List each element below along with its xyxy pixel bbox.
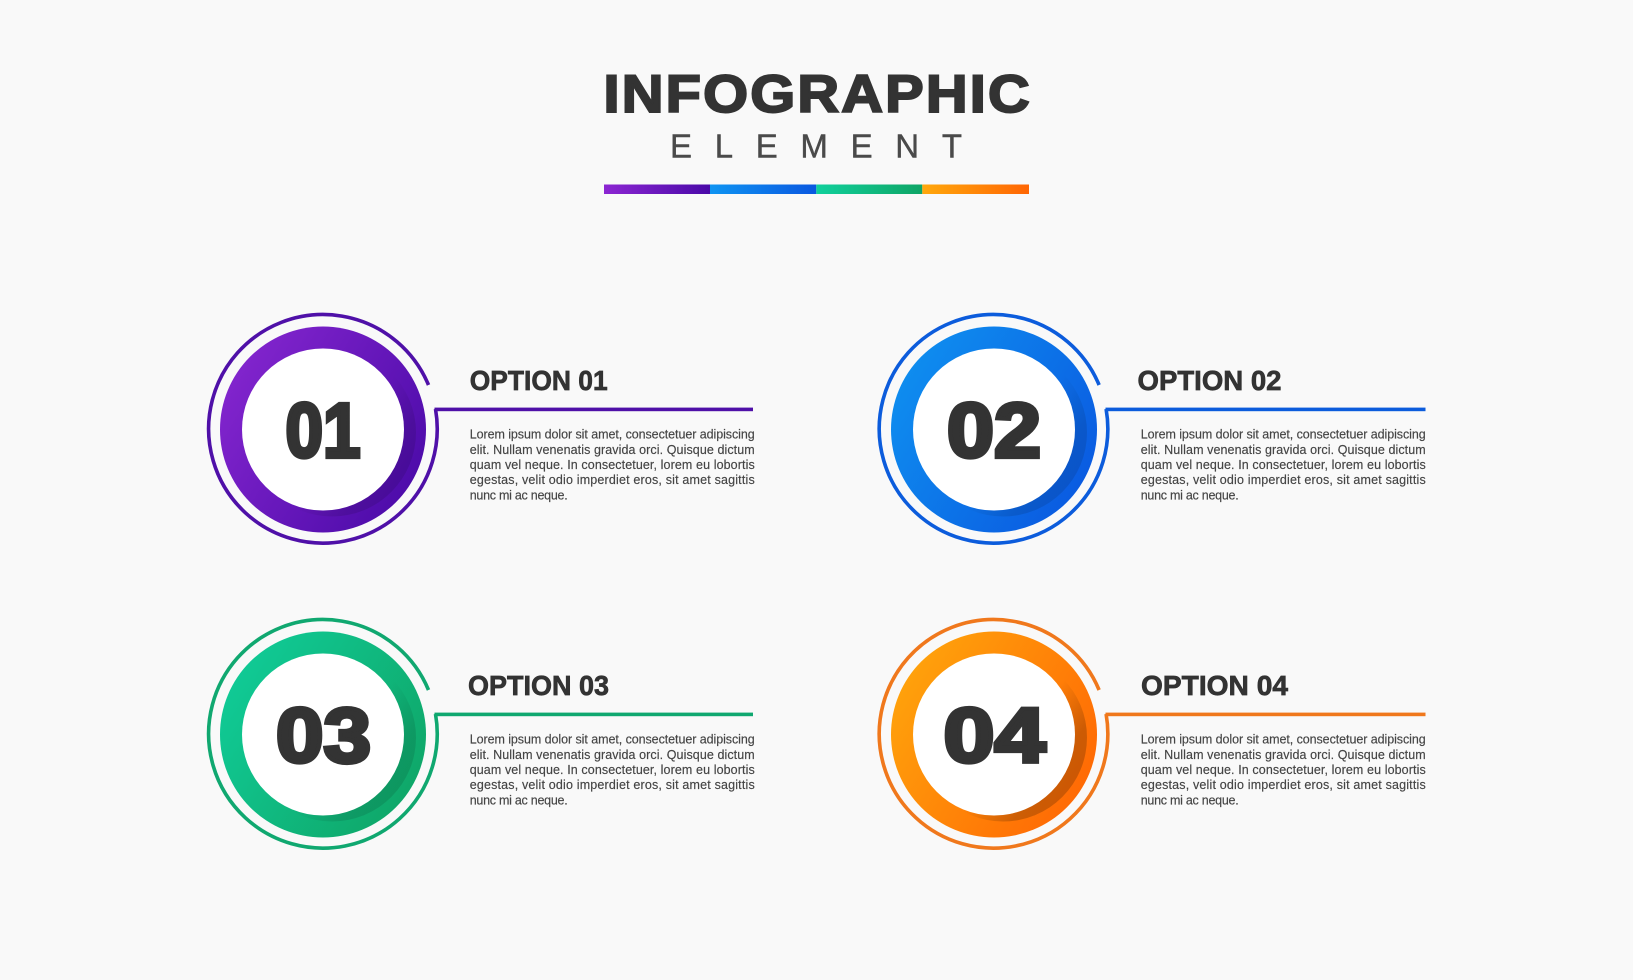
body text: egestas, velit odio imperdiet eros, sit amet sagittis xyxy=(470,473,755,487)
body text: nunc mi ac neque. xyxy=(1141,794,1239,808)
panel: option 02 xyxy=(879,315,1426,543)
icon: circle badge 03 xyxy=(209,620,437,848)
body text: Lorem ipsum dolor sit amet, consectetuer adipiscing xyxy=(470,732,755,746)
panel: option 03 xyxy=(209,620,755,848)
panel: option 04 xyxy=(879,620,1426,848)
heading: option 04: OPTION 04 xyxy=(1141,670,1288,701)
body text: quam vel neque. In consectetuer, lorem eu lobortis xyxy=(470,458,755,472)
title: INFOGRAPHIC xyxy=(604,64,1030,123)
connector line xyxy=(434,408,753,411)
body text: elit. Nullam venenatis gravida orci. Quisque dictum xyxy=(1141,748,1426,762)
subtitle: ELEMENT xyxy=(670,128,962,164)
body text: elit. Nullam venenatis gravida orci. Quisque dictum xyxy=(470,748,755,762)
body text xyxy=(1141,732,1426,808)
body text xyxy=(1141,428,1426,502)
heading: option 03: OPTION 03 xyxy=(468,670,609,701)
number 01: 01 xyxy=(286,388,360,474)
body text: nunc mi ac neque. xyxy=(470,488,568,502)
body text: egestas, velit odio imperdiet eros, sit amet sagittis xyxy=(1141,778,1426,792)
connector line xyxy=(434,713,753,716)
rainbow title bar xyxy=(604,184,1029,194)
body text: quam vel neque. In consectetuer, lorem eu lobortis xyxy=(1141,458,1426,472)
icon: circle badge 02 xyxy=(879,315,1108,543)
number 04: 04 xyxy=(944,693,1046,779)
body text: egestas, velit odio imperdiet eros, sit amet sagittis xyxy=(470,778,755,792)
number 03: 03 xyxy=(276,693,371,779)
number 02: 02 xyxy=(947,388,1041,474)
body text: elit. Nullam venenatis gravida orci. Quisque dictum xyxy=(470,443,755,457)
connector line xyxy=(1106,408,1426,411)
connector line xyxy=(1106,713,1426,716)
body text xyxy=(470,428,755,502)
body text: quam vel neque. In consectetuer, lorem eu lobortis xyxy=(1141,763,1426,777)
body text: Lorem ipsum dolor sit amet, consectetuer adipiscing xyxy=(1141,732,1426,746)
panel: option 01 xyxy=(209,315,755,543)
body text: Lorem ipsum dolor sit amet, consectetuer adipiscing xyxy=(1141,428,1426,442)
icon: circle badge 01 xyxy=(209,315,437,543)
body text: egestas, velit odio imperdiet eros, sit amet sagittis xyxy=(1141,473,1426,487)
body text: elit. Nullam venenatis gravida orci. Quisque dictum xyxy=(1141,443,1426,457)
body text: nunc mi ac neque. xyxy=(470,794,568,808)
body text: nunc mi ac neque. xyxy=(1141,488,1239,502)
body text: Lorem ipsum dolor sit amet, consectetuer adipiscing xyxy=(470,428,755,442)
body text: quam vel neque. In consectetuer, lorem eu lobortis xyxy=(470,763,755,777)
heading: option 02: OPTION 02 xyxy=(1138,365,1282,396)
icon: circle badge 04 xyxy=(879,620,1108,848)
body text xyxy=(470,732,755,808)
heading: option 01: OPTION 01 xyxy=(470,365,608,396)
